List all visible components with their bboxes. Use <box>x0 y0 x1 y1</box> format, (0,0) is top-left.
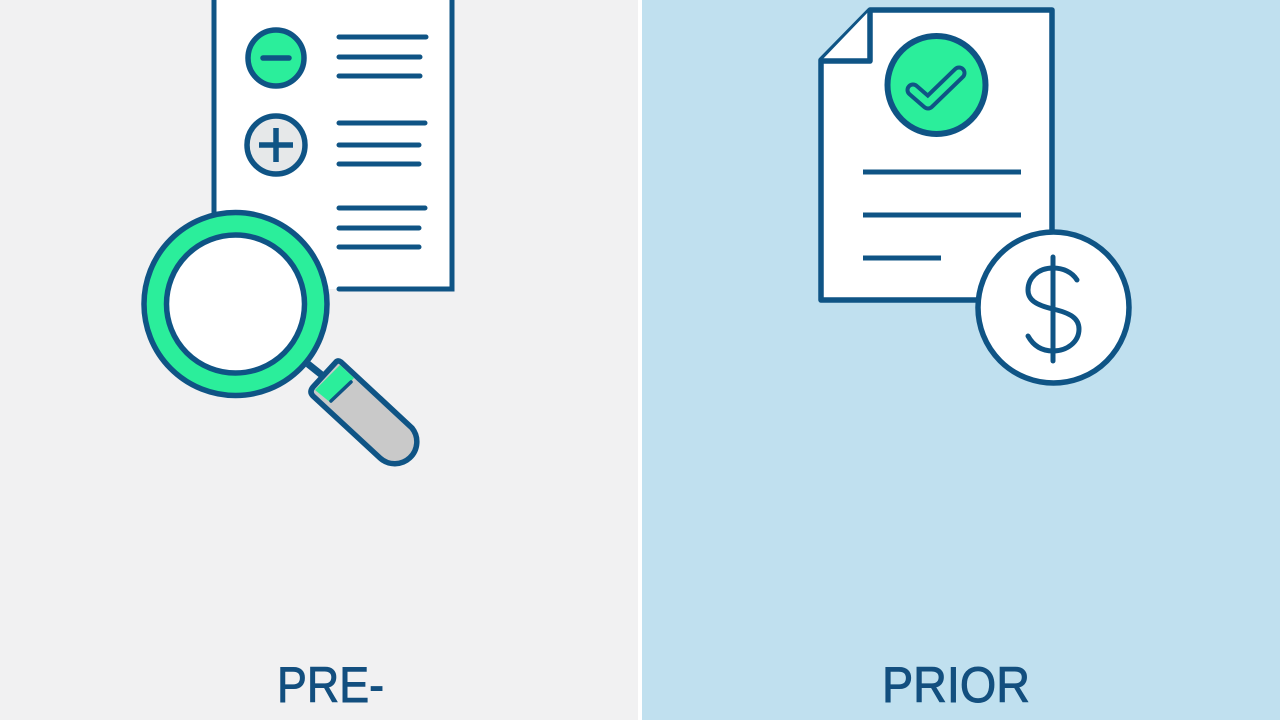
icon: plus circle <box>247 116 305 174</box>
icon: magnifying glass <box>144 212 417 464</box>
icon: check circle <box>888 36 986 134</box>
icon: approved document with dollar <box>821 10 1129 383</box>
icon: document with pros and cons <box>214 0 452 289</box>
icon: minus circle <box>248 30 304 86</box>
lens <box>144 212 327 396</box>
handle connector <box>308 364 323 376</box>
heading: prior: PRIOR <box>882 657 1030 713</box>
panel: pre- left background <box>0 0 638 720</box>
handle collar <box>315 365 354 403</box>
page fold <box>821 10 870 61</box>
panel: prior right background <box>642 0 1280 720</box>
icon: dollar coin <box>978 232 1129 383</box>
text lines <box>339 37 426 247</box>
handle <box>311 361 417 464</box>
text lines <box>863 172 1021 258</box>
heading: pre-: PRE- <box>277 657 384 713</box>
